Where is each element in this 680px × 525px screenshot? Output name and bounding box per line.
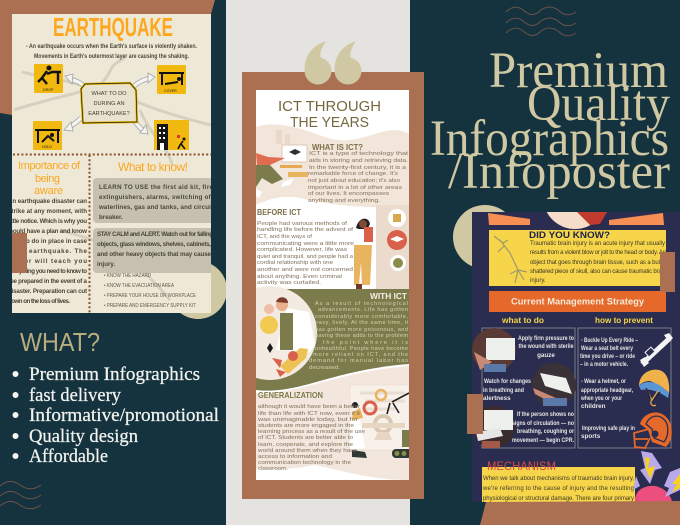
panel: stay calm: injury.	[97, 261, 115, 268]
text block: what is ICT: aids in storing and retrieving data.	[309, 158, 409, 164]
panel: what to do: gauze	[537, 352, 555, 359]
text block: importance: of an earthquake. The	[8, 248, 88, 255]
panel: did you know: Traumatic brain injury is an acute injury that usually	[530, 241, 665, 247]
text block: importance: what to do in place in case	[7, 238, 88, 245]
panel: how to prevent: sports	[581, 433, 601, 440]
panel: stay calm: STAY CALM and ALERT. Watch out for falling	[97, 231, 213, 238]
heading: mechanism: MECHANISM	[487, 459, 556, 473]
title	[279, 101, 380, 127]
title: EARTHQUAKE	[53, 12, 173, 42]
text block: what is ICT: not just about education; it's also	[308, 178, 400, 184]
panel: earthquake poster	[6, 12, 218, 313]
heading: how to prevent: how to prevent	[595, 315, 653, 325]
panel: mechanism: we're referring to the cause of injury and the resulting	[482, 486, 634, 492]
text block: importance: be prepared in the event of a	[10, 278, 88, 285]
title: THE YEARS	[290, 115, 369, 131]
title: premium quality infographics: Premium	[489, 43, 668, 99]
text block: with ICT: considerably more comfortable,	[315, 314, 408, 320]
title: premium quality infographics	[430, 43, 670, 200]
panel: did you know	[489, 230, 666, 286]
panel: what to do: alertness	[483, 395, 511, 402]
text block: importance: should have a plan and know	[6, 228, 87, 235]
text block: before ICT: ICT, and the ways of	[257, 234, 312, 240]
text block: with ICT: WITH ICT	[370, 292, 407, 301]
heading: importance of being aware: Importance of	[18, 160, 81, 172]
text block: before ICT: handling life before the advent of	[257, 227, 354, 233]
callout: what to do: WHAT TO DO	[91, 91, 127, 97]
callout: what to do: DURING AN	[93, 101, 125, 107]
text block: importance: little notice. Which is why you	[8, 218, 87, 225]
icon: cover sign	[157, 65, 186, 94]
panel: did you know: results from a violent blow or jolt to the head or body. An	[530, 250, 666, 256]
panel: mechanism: When we talk about mechanisms of traumatic brain injury,	[483, 476, 634, 482]
panel: what to do: Apply firm pressure to	[518, 335, 574, 342]
text block: before ICT: complicated. However, life was	[257, 247, 347, 253]
icon: drop sign: DROP	[43, 88, 54, 92]
checklist: • PREPARE YOUR HOUSE OR WORKPLACE	[104, 293, 196, 299]
text block: with ICT	[309, 292, 408, 371]
icon: building evacuation sign	[154, 120, 189, 150]
heading: importance of being aware	[19, 161, 80, 194]
intro text: Movements in Earth's outermost layer are causing the shaking.	[34, 53, 189, 60]
panel: what to do	[472, 328, 576, 448]
text block: generalization: was unimaginable today, but for	[257, 417, 358, 423]
text block: generalization: although it would have been a better	[258, 404, 360, 410]
panel: what to do: movement — begin CPR.	[512, 437, 574, 444]
panel: how to prevent: – in a motor vehicle.	[580, 361, 628, 368]
panel: did you know: DID YOU KNOW?	[529, 230, 610, 240]
text block: generalization: life than life with ICT now, even if it	[258, 411, 361, 417]
panel: mechanism: physiological or structural damage. There are four primary	[483, 496, 634, 502]
panel: how to prevent: time you drive – or ride	[580, 353, 635, 360]
icon: seat belt	[640, 333, 673, 367]
list: features: Affordable	[29, 447, 108, 467]
icon: neuron	[494, 236, 527, 283]
text block: importance: everything you need to know to	[8, 268, 87, 275]
text block: with ICT: demand for manual labor has	[309, 358, 408, 364]
panel: learn to use: waterlines, gas and tanks, and circuit	[98, 204, 213, 211]
text block: what is ICT: anything and everything.	[308, 198, 381, 204]
text block: what is ICT: WHAT IS ICT?	[312, 143, 363, 152]
text block: importance: disaster. Preparation can cut	[8, 288, 87, 295]
checklist	[104, 273, 196, 309]
heading: what to know: What to know!	[118, 160, 188, 174]
intro text: - An earthquake occurs when the Earth's surface is violently shaken.	[26, 43, 197, 50]
text block: what is ICT: important in a lot of other areas	[308, 185, 402, 191]
background shape: brown corner	[0, 0, 215, 115]
text block: generalization: communication technology in the	[258, 460, 351, 466]
heading: what: WHAT?	[20, 327, 100, 357]
panel: brown frame	[242, 72, 424, 499]
text block: before ICT	[257, 207, 354, 286]
panel: learn to use: extinguishers, alarms, switching off	[99, 194, 214, 201]
title: premium quality infographics: Quality	[527, 76, 670, 132]
background shape: brown tab on earthquake poster	[12, 233, 27, 273]
checklist: • KNOW THE EVACUATION AREA	[104, 283, 174, 289]
text block: before ICT: activity was curtailed.	[257, 280, 322, 286]
header graphic	[488, 212, 664, 229]
text block: what is ICT: ICT is a type of technology that	[309, 151, 409, 157]
photo: pressure wound	[472, 328, 516, 372]
icon: hold sign	[33, 121, 62, 150]
text block: with ICT: decreased.	[309, 365, 340, 371]
text block: with ICT: has gotten more poisonous, and	[315, 327, 408, 333]
text block: what is ICT: In the twenty-first century, it is a	[309, 165, 407, 171]
text block: with ICT: having these adds to the problem	[315, 333, 408, 339]
title: premium quality infographics: /Infoposter	[448, 144, 670, 200]
text block: importance: poster will teach you	[8, 258, 87, 265]
text block: importance: down on the loss of lives.	[8, 298, 70, 305]
text block: importance	[12, 198, 87, 303]
heading: what to do: what to do	[501, 315, 544, 325]
panel: how to prevent: Wear a seat belt every	[581, 345, 633, 352]
icon: brain with lightning	[633, 451, 680, 502]
panel: stay calm	[93, 228, 218, 273]
callout: what to do: EARTHQUAKE?	[88, 111, 130, 117]
text block: generalization: students are more engaged in the	[258, 423, 354, 429]
text block: what is ICT	[308, 143, 409, 204]
panel: what to do: the wound with sterile	[518, 343, 574, 350]
text block: generalization: learning process as a result of the use	[258, 429, 365, 435]
panel: how to prevent: children	[581, 403, 606, 410]
heading: importance of being aware: aware	[34, 185, 63, 197]
icon: cycling helmet	[639, 370, 669, 406]
title: ICT THROUGH	[278, 99, 381, 115]
panel: did you know: injury.	[530, 278, 546, 284]
panel: how to prevent: when you or your	[580, 395, 622, 402]
icons: circles column	[387, 209, 407, 271]
list: features: fast delivery	[29, 386, 122, 406]
text block: before ICT: quiet and tranquil, and people had a	[257, 254, 354, 260]
background shape: khaki circle	[169, 261, 227, 319]
photo: CPR	[473, 406, 515, 448]
list: features: Quality design	[29, 427, 138, 447]
list: features: Informative/promotional	[29, 406, 219, 426]
background shape: brown tab left	[467, 394, 483, 434]
decoration: waves top right	[506, 7, 576, 36]
text block: generalization: of ICT. Students are better able to	[258, 435, 353, 441]
text block: before ICT: another and were not concerned	[257, 267, 353, 273]
text block: before ICT: BEFORE ICT	[257, 207, 302, 217]
checklist: • KNOW THE HAZARD	[104, 273, 151, 279]
icon: cover sign: COVER	[164, 89, 177, 93]
text block: with ICT: unhealthful. People have become	[315, 346, 408, 352]
text block: with ICT: the point where it is	[323, 340, 408, 346]
panel: brain injury poster	[472, 212, 680, 502]
panel: stay calm: objects, glass windows, shelves, cabinets,	[97, 241, 211, 248]
text block: generalization	[257, 390, 365, 472]
banner: current management strategy: Current Management Strategy	[511, 296, 645, 308]
illustration: woman with book	[354, 219, 374, 289]
panel: light middle background	[226, 0, 410, 525]
panel: what to do: in breathing and	[483, 387, 524, 394]
panel: did you know: object that goes through brain tissue, such as a bullet	[530, 260, 666, 266]
icon: football helmet	[634, 412, 672, 448]
text block: what is ICT: of our lives. It encompasses	[308, 191, 389, 197]
text block: what is ICT: remarkable force of change. It's	[308, 171, 398, 177]
illustration: gears and robot arm	[350, 385, 412, 458]
panel: how to prevent: - Wear a helmet, or	[581, 378, 626, 385]
intro text	[26, 43, 197, 60]
icon: drop sign	[34, 64, 63, 93]
heading: importance of being aware: being	[35, 173, 60, 185]
text block: generalization: learn, cooperate, and explore the	[258, 442, 353, 448]
text block: generalization: world around them when they have	[257, 448, 357, 454]
callout: what to do	[81, 83, 137, 123]
banner: current management strategy	[489, 291, 666, 312]
text block: generalization: access to information and	[258, 454, 332, 460]
panel: mechanism	[482, 467, 635, 503]
panel: stay calm: and other heavy objects that may cause	[97, 251, 212, 258]
background shape: khaki circle right	[453, 205, 517, 269]
list: features	[12, 365, 219, 467]
text block: generalization: classroom.	[258, 466, 288, 472]
decoration: waves left	[0, 481, 41, 509]
text block: importance: An earthquake disaster can	[8, 198, 87, 205]
panel: learn to use: breaker.	[99, 214, 123, 221]
panel: learn to use: LEARN TO USE the first aid kit, fire	[99, 184, 214, 191]
list: features: Premium Infographics	[29, 365, 200, 385]
text block: before ICT: communicating were a little more	[257, 241, 354, 247]
panel: how to prevent: appropriate headgear,	[581, 387, 633, 394]
panel: did you know: shattered piece of skull, also can cause traumatic brain	[530, 269, 666, 275]
panel: what to do: Watch for changes	[484, 378, 531, 385]
text block: with ICT: As a result of technological	[315, 301, 408, 307]
icon: quotation marks	[304, 41, 362, 84]
panel: learn to use	[93, 178, 218, 223]
panel: ICT poster	[256, 90, 409, 480]
text block: before ICT: cordial relationship with one	[257, 260, 333, 266]
arrows to signs	[64, 73, 155, 134]
text block: importance: strike at any moment, with	[8, 208, 87, 215]
panel: how to prevent: - Buckle Up Every Ride –	[581, 337, 638, 344]
illustration: inventor circle	[256, 286, 317, 380]
text block: with ICT: more reliant on ICT, and the	[313, 352, 408, 358]
panel: how to prevent	[578, 328, 673, 448]
text block: with ICT: easy, lively. At the same time, it	[315, 320, 408, 326]
panel: what to do: signs of circulation — no	[512, 420, 574, 427]
checklist: • PREPARE AND EMERGENCY SUPPLY KIT	[104, 303, 196, 309]
text block: before ICT: about anything. Even criminal	[257, 274, 342, 280]
background shape: brown bottom	[480, 501, 680, 525]
icon: hold sign: HOLD	[42, 145, 52, 149]
panel: what to do: If the person shows no	[517, 411, 574, 418]
illustration: student with laptop	[256, 130, 308, 198]
panel: how to prevent: Improving safe play in	[582, 425, 635, 432]
panel: what to do: breathing, coughing or	[517, 428, 574, 435]
text block: generalization: GENERALIZATION	[258, 390, 323, 400]
text block: with ICT: advancements. Life has gotten	[318, 307, 408, 313]
photo: checking breathing	[532, 363, 576, 407]
text block: before ICT: People had various methods of	[257, 221, 348, 227]
background shape: brown tab right	[660, 252, 675, 292]
